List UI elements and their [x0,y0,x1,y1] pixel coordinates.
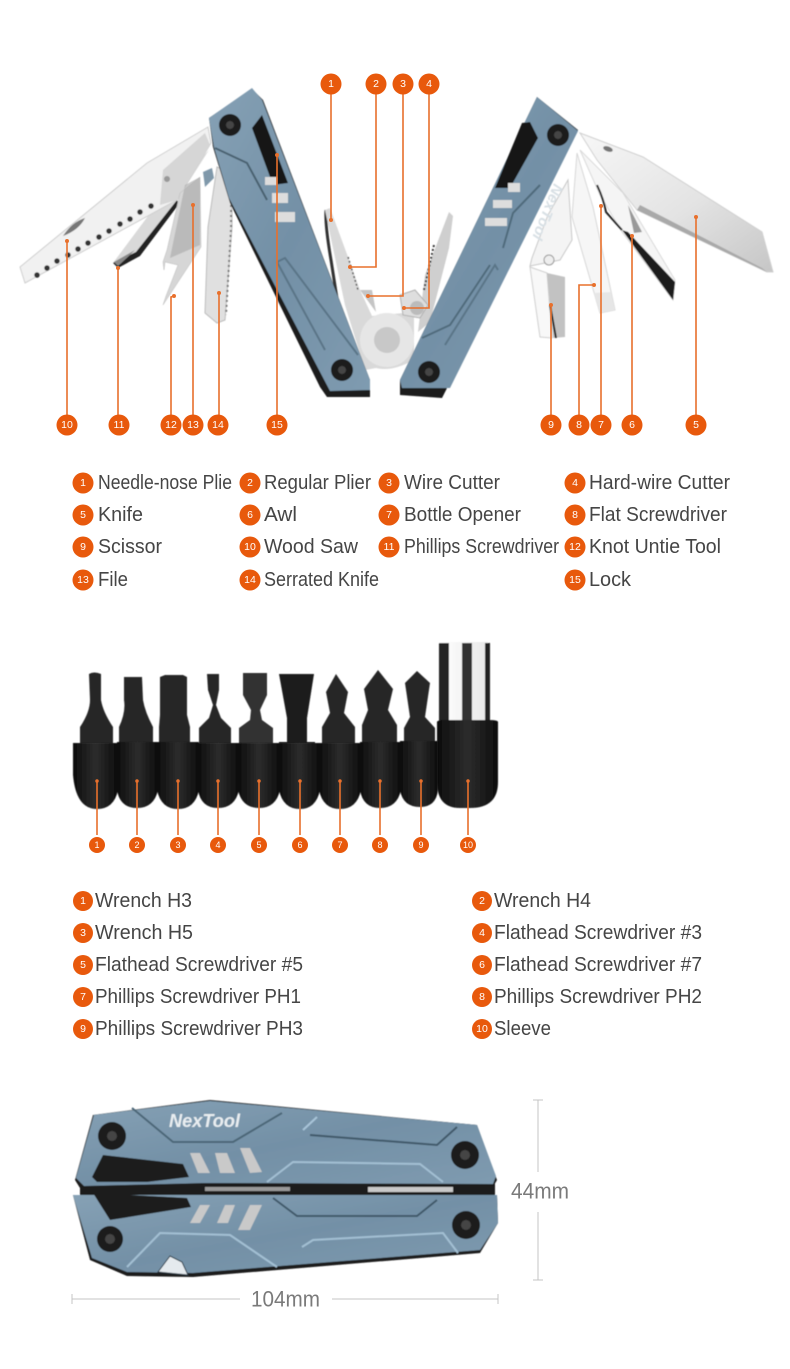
scissor [530,180,572,338]
callout leader lines [67,84,696,425]
bit badges: 3 [175,840,181,850]
badge 15: 15 [271,419,283,431]
item 15: 15 [569,574,581,586]
bit badges: 4 [215,840,221,850]
badge 8: 8 [576,419,582,431]
logo: NexTool [169,1110,241,1131]
item 1: 1 [80,477,86,489]
badge 11: 11 [114,419,125,431]
item 13: 13 [77,574,89,586]
badge 8 [568,414,590,436]
right handle logo: NexTool [528,182,566,243]
item 13 [72,569,128,591]
bit badges: 2 [134,840,140,850]
bit item 4: 4 [479,927,485,939]
item 7: 7 [386,509,392,521]
item 8: 8 [572,509,578,521]
badge 5: 5 [693,419,699,431]
bit badges: 1 [94,840,100,850]
badge 5 [686,414,706,436]
badge 4: 4 [426,78,432,90]
badge 14: 14 [212,419,224,431]
bit item 4: Flathead Screwdriver #3 [494,922,702,944]
badge 7 [590,414,612,436]
pouches [73,741,438,809]
bit item 10 [472,1018,551,1040]
bit item 7: 7 [80,991,86,1003]
badge 3 [392,74,414,94]
item 14: 14 [244,574,256,586]
bit item 1: 1 [80,895,86,907]
item 6: 6 [247,509,253,521]
phillips screwdriver blade [113,150,209,268]
bit item 5: 5 [80,959,86,971]
badge 12: 12 [165,419,177,431]
knife blade [580,133,773,272]
bit item 6: Flathead Screwdriver #7 [494,954,702,976]
item 4: Hard-wire Cutter [589,472,730,494]
item 11: Phillips Screwdriver [404,536,559,558]
bit item 5: Flathead Screwdriver #5 [95,954,303,976]
bit item 1: Wrench H3 [95,890,192,912]
right handle [400,97,578,398]
item 10: Wood Saw [264,536,359,558]
item 9: Scissor [98,536,162,558]
bits [80,670,435,744]
badge 7: 7 [598,419,604,431]
badge 10: 10 [61,419,73,431]
item 9: 9 [80,541,86,553]
badge 1 [320,74,342,94]
badge 6: 6 [629,419,635,431]
legend: multitool parts [72,472,730,591]
item 14: Serrated Knife [264,569,379,591]
bit badges: 8 [377,840,383,850]
item 10: 10 [244,541,256,553]
item 3: 3 [386,477,392,489]
item 1: Needle-nose Plie [98,472,232,494]
dimension: width 104mm: 104mm [251,1286,320,1312]
bit item 9: 9 [80,1023,86,1035]
item 15: Lock [589,569,632,591]
file and knot untie tool [163,168,214,305]
numbered callouts on multitool [56,74,706,436]
bit item 2: Wrench H4 [494,890,591,912]
item 4: 4 [572,477,578,489]
badge 13: 13 [187,419,199,431]
bit set [73,642,498,853]
badge 10 [56,414,78,436]
bit item 9: Phillips Screwdriver PH3 [95,1018,303,1040]
badge 9: 9 [548,419,554,431]
badge 4 [418,74,440,94]
bit badges: 6 [297,840,303,850]
bit badges: 5 [256,840,262,850]
item 5: 5 [80,509,86,521]
badge 13 [182,414,204,436]
closed multitool [73,1100,498,1277]
bit item 3: Wrench H5 [95,922,193,944]
flat screwdriver [572,153,615,313]
needle-nose and regular pliers [325,208,453,370]
dimension: height 44mm [511,1100,569,1280]
item 5: Knife [98,504,143,526]
item 2: Regular Plier [264,472,371,494]
badge 9 [540,414,562,436]
badge 2: 2 [373,78,379,90]
item 2: 2 [247,477,253,489]
badge 6 [622,414,642,436]
badge 15 [266,414,288,436]
bit badges: 7 [337,840,343,850]
dimension: width 104mm [72,1286,498,1312]
item 12: 12 [569,541,581,553]
legend: bit set [73,890,702,1040]
item 6 [240,504,297,526]
item 6: Awl [264,504,297,526]
badge 2 [366,74,386,94]
item 13: File [98,569,128,591]
badge 14 [208,414,228,436]
bit item 8: 8 [479,991,485,1003]
wood saw blade [20,127,211,283]
badge 1: 1 [328,78,334,90]
multitool open view [20,88,773,398]
item 15 [564,569,632,591]
bit item 8: Phillips Screwdriver PH2 [494,986,702,1008]
bit badges: 9 [418,840,424,850]
badge 3: 3 [400,78,406,90]
badge 11 [108,414,130,436]
bit badges: 10 [463,840,473,850]
bit badges [89,837,476,853]
upper handle [75,1100,497,1188]
item 8: Flat Screwdriver [589,504,727,526]
left handle [209,88,370,397]
bit item 10: 10 [476,1023,488,1035]
dimension: height 44mm: 44mm [511,1178,569,1204]
centre strip [80,1184,495,1195]
item 5 [72,504,143,526]
bit item 10: Sleeve [494,1018,551,1040]
item 12: Knot Untie Tool [589,536,721,558]
bit item 7: Phillips Screwdriver PH1 [95,986,301,1008]
bit item 6: 6 [479,959,485,971]
bit item 2: 2 [479,895,485,907]
bit item 3: 3 [80,927,86,939]
bit leader lines [97,781,468,835]
item 7: Bottle Opener [404,504,521,526]
lower handle [73,1193,498,1277]
serrated knife [205,167,232,323]
item 3: Wire Cutter [404,472,500,494]
item 11: 11 [384,541,395,553]
awl and bottle opener [580,150,675,300]
badge 12 [160,414,182,436]
sleeve socket [437,642,498,808]
